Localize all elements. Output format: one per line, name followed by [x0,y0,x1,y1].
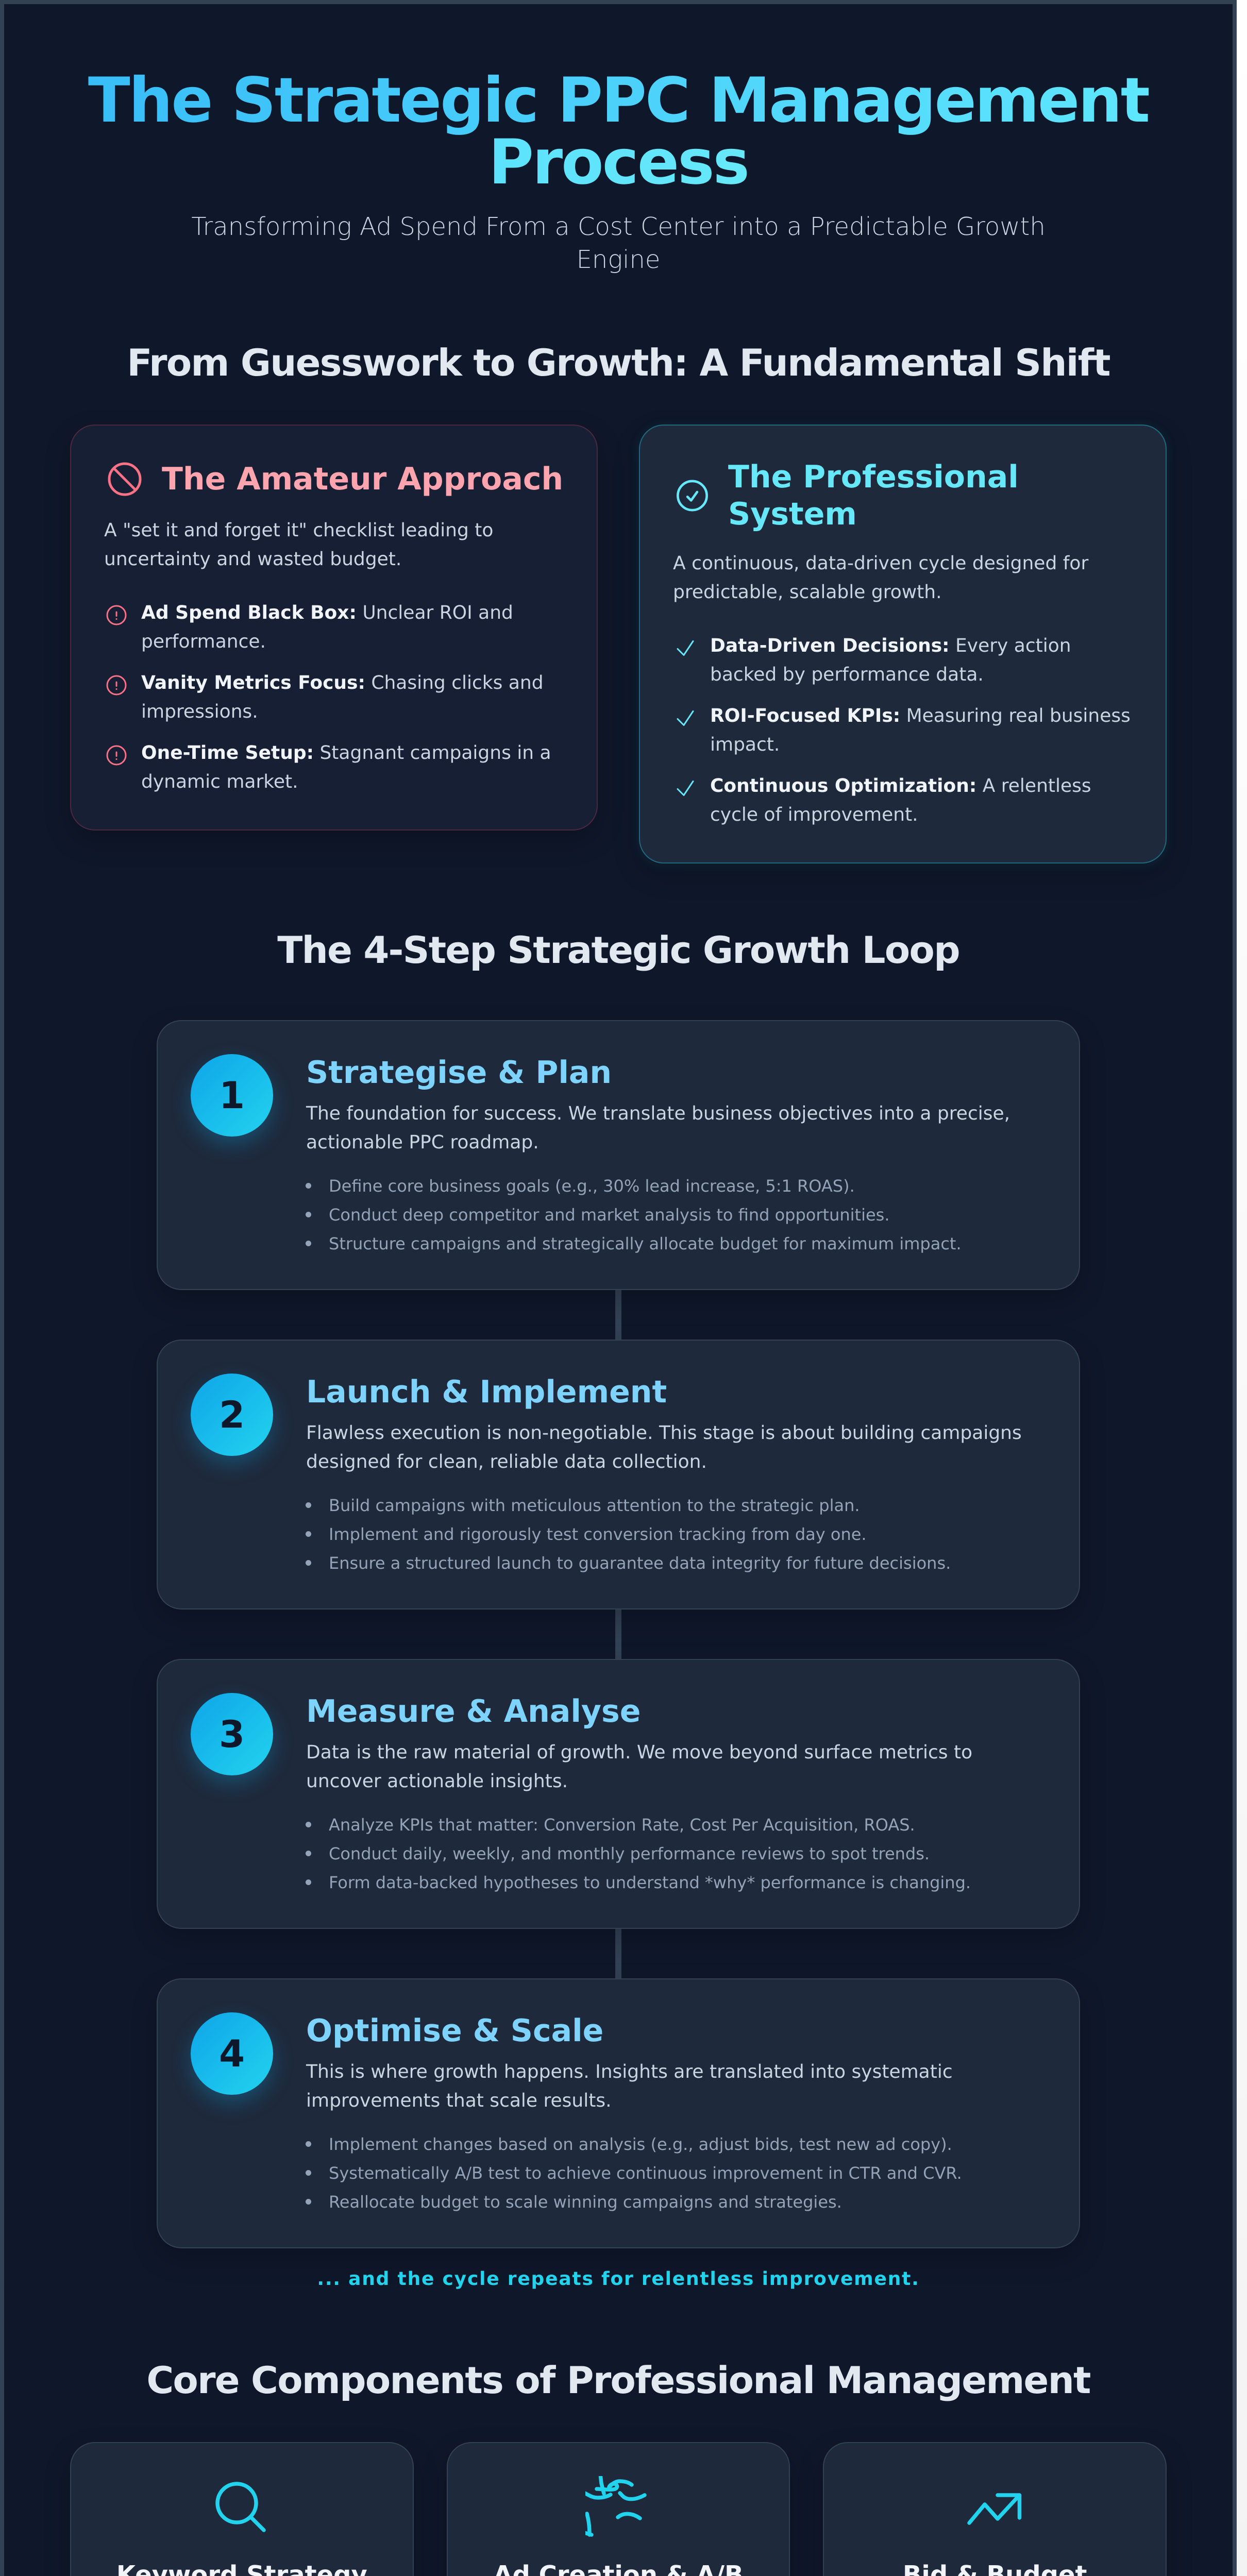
list item: vanity metrics focus [141,672,544,722]
icon: no symbol [108,463,141,496]
icon: magnifier [210,2476,272,2538]
title: The Strategic PPC Management [88,65,1149,137]
step 3 heading: Measure & Analyse [306,1693,641,1730]
panel: keyword strategy [70,2442,414,2576]
panel: the amateur approach [70,425,598,831]
step number 3: 3 [219,1713,245,1756]
icon: check 2 [677,710,694,726]
step 2 description: Flawless execution is non-negotiable. This stage is about building campaigns [306,1422,1022,1444]
step number 2 [191,1374,273,1456]
step number 4: 4 [219,2032,245,2075]
step 3 bullets [306,1810,971,1897]
step number 2: 2 [219,1393,245,1436]
amateur description: uncertainty and wasted budget. [104,549,401,570]
step 2 bullets: Ensure a structured launch to guarantee data integrity for future decisions. [329,1553,951,1573]
professional description: A continuous, data-driven cycle designed for [673,553,1088,574]
icon: alert 2 [106,675,127,696]
professional heading: System [728,496,857,532]
step 3 description [306,1742,972,1792]
list item: roi-focused kpis [710,705,1131,755]
step 4 description: improvements that scale results. [306,2090,612,2111]
step 4 description [306,2058,953,2115]
icon: broken ad creation glyph [585,2476,652,2538]
professional description [673,553,1088,603]
step 4 bullets: Reallocate budget to scale winning campaigns and strategies. [329,2192,842,2212]
list item: ad spend black box: Ad Spend Black Box: Unclear ROI and [141,602,513,623]
step 4 bullets: Implement changes based on analysis (e.g., adjust bids, test new ad copy). [329,2134,952,2154]
step 4 description: This is where growth happens. Insights are translated into systematic [306,2061,953,2082]
step 1 bullets: Define core business goals (e.g., 30% lead increase, 5:1 ROAS). [329,1176,855,1196]
icon: trending arrow [964,2476,1026,2538]
connector 2-3 [615,1609,621,1659]
list item: continuous optimization: Continuous Optimization: A relentless [710,775,1091,796]
icon: check 1 [677,640,694,656]
step 2 panel [157,1340,1080,1609]
subtitle: Transforming Ad Spend From a Cost Center into a Predictable Growth [191,212,1046,241]
amateur description [104,520,493,570]
step 4 bullets: Systematically A/B test to achieve continuous improvement in CTR and CVR. [329,2163,962,2183]
step 1 description [306,1103,1010,1153]
step 1 description: actionable PPC roadmap. [306,1132,539,1153]
step 3 description: Data is the raw material of growth. We move beyond surface metrics to [306,1742,972,1763]
professional heading [728,459,1019,532]
list item: ad spend black box: performance. [141,631,266,652]
icon: alert 1 [106,605,127,625]
list item: ad spend black box [141,602,513,652]
subtitle [191,212,1046,274]
professional heading: The Professional [728,459,1019,495]
step number 4 [191,2012,273,2095]
step 1 description: The foundation for success. We translate business objectives into a precise, [306,1103,1010,1124]
step 2 heading: Launch & Implement [306,1374,667,1410]
list item: one-time setup: One-Time Setup: Stagnant campaigns in a [141,742,551,764]
step number 3 [191,1693,273,1775]
heading: from guesswork to growth: From Guesswork to Growth: A Fundamental Shift [127,341,1110,384]
title: Process [488,127,748,198]
step 2 bullets: Build campaigns with meticulous attention to the strategic plan. [329,1496,860,1515]
step 4 heading: Optimise & Scale [306,2013,603,2049]
list item: vanity metrics focus: impressions. [141,701,258,722]
list item: data-driven decisions [710,635,1071,685]
step 1 bullets: Structure campaigns and strategically allocate budget for maximum impact. [329,1234,962,1253]
cycle repeat note: ... and the cycle repeats for relentless improvement. [317,2268,920,2290]
list item: vanity metrics focus: Vanity Metrics Focus: Chasing clicks and [141,672,544,693]
step 3 bullets: Analyze KPIs that matter: Conversion Rate, Cost Per Acquisition, ROAS. [329,1815,915,1835]
heading: core components: Core Components of Professional Management [146,2359,1090,2402]
icon: check circle [677,480,708,511]
subtitle: Engine [577,245,660,274]
step 4 bullets [306,2130,962,2216]
step 3 description: uncover actionable insights. [306,1771,568,1792]
step number 1 [191,1054,273,1137]
step number 1: 1 [219,1074,245,1117]
step 2 bullets: Implement and rigorously test conversion tracking from day one. [329,1524,867,1544]
step 1 bullets [306,1176,962,1253]
step 3 bullets: Conduct daily, weekly, and monthly performance reviews to spot trends. [329,1844,930,1863]
connector 1-2 [615,1290,621,1340]
list item: continuous optimization: cycle of improvement. [710,804,918,825]
list item: one-time setup: dynamic market. [141,771,298,792]
step 3 bullets: Form data-backed hypotheses to understand *why* performance is changing. [329,1873,971,1892]
step 1 panel [157,1020,1080,1290]
list item: one-time setup [141,742,551,792]
step 1 bullets: Conduct deep competitor and market analysis to find opportunities. [329,1205,889,1225]
step 1 heading: Strategise & Plan [306,1055,612,1091]
step 4 panel [157,1978,1080,2248]
list item: continuous optimization [710,775,1091,825]
list item: data-driven decisions: backed by performance data. [710,664,984,685]
icon: check 3 [677,780,694,796]
step 2 bullets [306,1496,951,1573]
amateur description: A "set it and forget it" checklist leading to [104,520,493,541]
step 3 panel [157,1659,1080,1929]
heading: 4-step growth loop: The 4-Step Strategic Growth Loop [277,928,959,972]
list item: roi-focused kpis: ROI-Focused KPIs: Measuring real business [710,705,1131,726]
icon: alert 3 [106,745,127,766]
panel: the professional system [639,425,1167,863]
professional description: predictable, scalable growth. [673,582,942,603]
list item: roi-focused kpis: impact. [710,734,780,755]
title [88,65,1149,198]
step 2 description: designed for clean, reliable data collection. [306,1451,707,1472]
connector 3-4 [615,1929,621,1978]
amateur heading: The Amateur Approach [162,461,563,497]
step 2 description [306,1422,1022,1472]
panel: ad creation [447,2442,790,2576]
panel: bid and budget [823,2442,1167,2576]
list item: data-driven decisions: Data-Driven Decisions: Every action [710,635,1071,656]
